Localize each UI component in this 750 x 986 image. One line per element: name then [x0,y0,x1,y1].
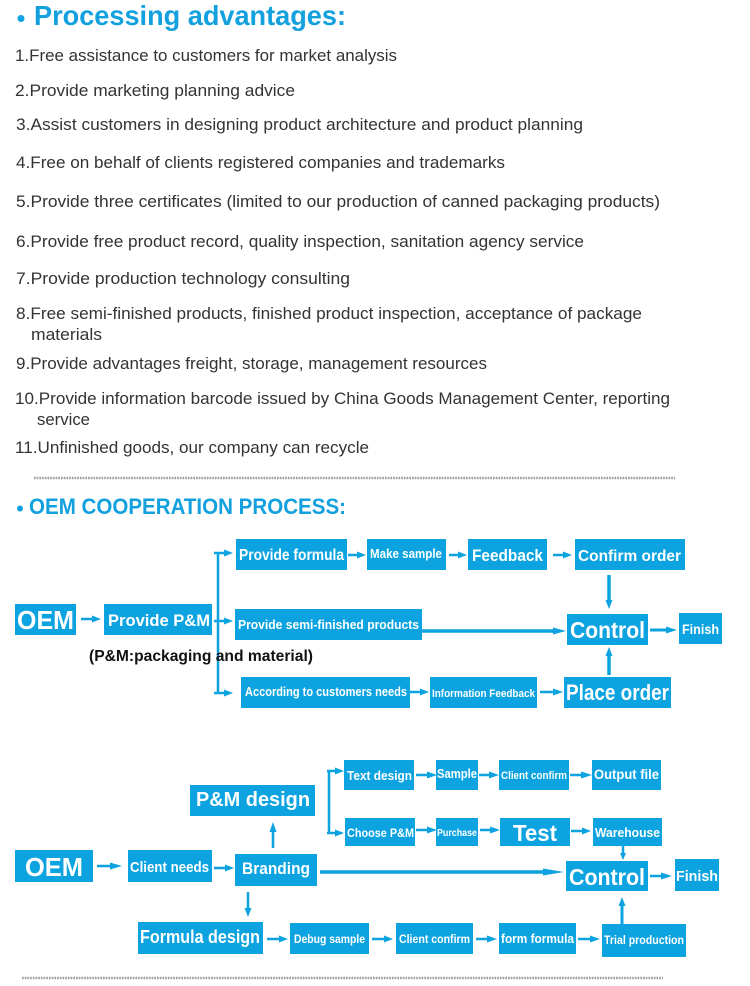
arrow: choose P&M to purchase [416,826,437,834]
arrow: OEM to client needs [97,862,122,870]
box: Client confirm: Client confirm [501,770,567,782]
box: Text design: Text design [347,769,412,783]
arrow: feedback to confirm order [553,552,572,558]
arrow: client needs to branding [214,864,234,872]
box: Formula design: Formula design [140,927,260,947]
caption: P&M meaning: (P&M:packaging and material) [89,648,313,665]
box: Client needs [128,850,212,882]
arrow: semi-finished to control [422,628,566,634]
arrow: branding to formula design [244,892,252,917]
item 7: 7.Provide production technology consulting [16,269,350,288]
box: Provide formula [236,539,347,570]
item 8: materials [31,325,102,344]
box: Provide P&M: Provide P&M [108,611,210,630]
box: Text design [344,760,414,790]
arrow: place order to control [606,647,612,675]
box: Purchase: Purchase [437,827,477,839]
box: According to customers needs: According to customers needs [245,685,407,699]
box: Control: Control [569,864,645,890]
item 2: 2.Provide marketing planning advice [15,81,295,100]
item 6: 6.Provide free product record, quality inspection, sanitation agency service [16,232,584,251]
arrow: needs to information feedback [410,688,429,696]
box: Sample [436,760,478,790]
arrow: purchase to test [480,826,500,834]
arrow: text design to sample [416,772,437,778]
arrow: make sample to feedback [449,552,467,558]
heading: OEM cooperation process: OEM COOPERATION PROCESS: [29,494,346,519]
box: OEM: OEM [17,605,74,635]
arrow: control to finish [650,872,672,880]
box: Debug sample: Debug sample [294,932,365,946]
box: OEM: OEM [25,852,83,882]
box: Finish: Finish [676,868,718,885]
box: Trial production [602,924,686,957]
arrow: warehouse to control [620,846,626,860]
arrow: sample to client confirm [479,772,499,778]
arrow: control to finish [650,626,677,634]
box: Make sample [367,539,446,570]
box: Test [500,818,570,846]
box: Confirm order [575,539,685,570]
box: Test: Test [513,820,557,846]
arrow: formula to make sample [348,552,366,558]
box: Debug sample [290,923,369,954]
arrow: test to warehouse [571,828,591,834]
box: Provide P&M [104,604,212,635]
box: Branding: Branding [242,859,310,878]
box: Make sample: Make sample [370,547,442,561]
box: form formula [499,923,576,954]
box: Output file: Output file [594,766,659,782]
box: Finish [675,859,719,891]
box: Feedback: Feedback [472,546,543,565]
box: Provide semi-finished products: Provide semi-finished products [238,617,419,632]
item 5: 5.Provide three certificates (limited to our production of canned packaging products) [16,192,660,211]
arrow: branding to P&M design [270,822,276,848]
box: form formula: form formula [501,932,575,946]
box: Control: Control [570,617,645,643]
item 4: 4.Free on behalf of clients registered companies and trademarks [16,153,505,172]
arrow: OEM to provide P&M [81,616,101,622]
heading: processing advantages: Processing advantages: [34,0,346,31]
box: Provide formula: Provide formula [239,547,344,564]
box: P&M design: P&M design [196,789,310,811]
box: According to customers needs [241,677,410,708]
item 10 [15,389,670,429]
box: Warehouse [593,818,662,846]
item 1: 1.Free assistance to customers for market analysis [15,46,397,65]
box: Client needs: Client needs [130,859,209,876]
branch arrows from provide P&M [214,550,233,696]
arrow: trial production to control [618,897,626,924]
item 10: service [37,410,90,429]
box: Purchase [436,818,478,846]
flowchart: branding and design [15,760,719,957]
box: Client confirm: Client confirm [399,932,470,946]
box: Feedback [468,539,547,570]
box: Branding [235,854,317,886]
box: Finish [679,613,722,644]
box: Trial production: Trial production [604,933,684,947]
box: P&M design [190,785,315,816]
box: Finish: Finish [682,621,719,637]
item 9: 9.Provide advantages freight, storage, management resources [16,354,487,373]
box: Provide semi-finished products [235,609,422,640]
item 11: 11.Unfinished goods, our company can recycle [15,438,369,457]
box: Choose P&M [345,818,415,846]
arrow: branding to control [320,868,564,876]
flowchart: provide packaging and material [15,539,722,708]
item 10: 10.Provide information barcode issued by China Goods Management Center, reporting [15,389,670,408]
arrow: form formula to trial production [578,936,600,942]
arrow: confirm order to control [606,575,612,609]
item 3: 3.Assist customers in designing product architecture and product planning [16,115,583,134]
item 8: 8.Free semi-finished products, finished product inspection, acceptance of package [16,304,642,323]
box: Client confirm [396,923,473,954]
box: Formula design [138,922,263,954]
box: Client confirm [499,760,569,790]
box: Choose P&M: Choose P&M [347,826,414,840]
arrow: formula design to debug sample [267,936,288,942]
box: Output file [592,760,661,790]
box: Warehouse: Warehouse [595,825,660,840]
box: Sample: Sample [437,767,477,781]
arrow: client confirm to output file [570,772,592,778]
list: advantages [15,46,670,457]
box: Place order: Place order [566,680,669,705]
arrow: information feedback to place order [540,688,563,696]
box: Confirm order: Confirm order [578,548,681,565]
arrow: debug sample to client confirm [372,936,393,942]
arrow: client confirm to form formula [476,936,497,942]
box: Information Feedback: Information Feedback [432,688,536,700]
item 8 [16,304,642,344]
box: Information Feedback [430,677,537,708]
branch arrows to text design and choose P&M [327,768,344,836]
